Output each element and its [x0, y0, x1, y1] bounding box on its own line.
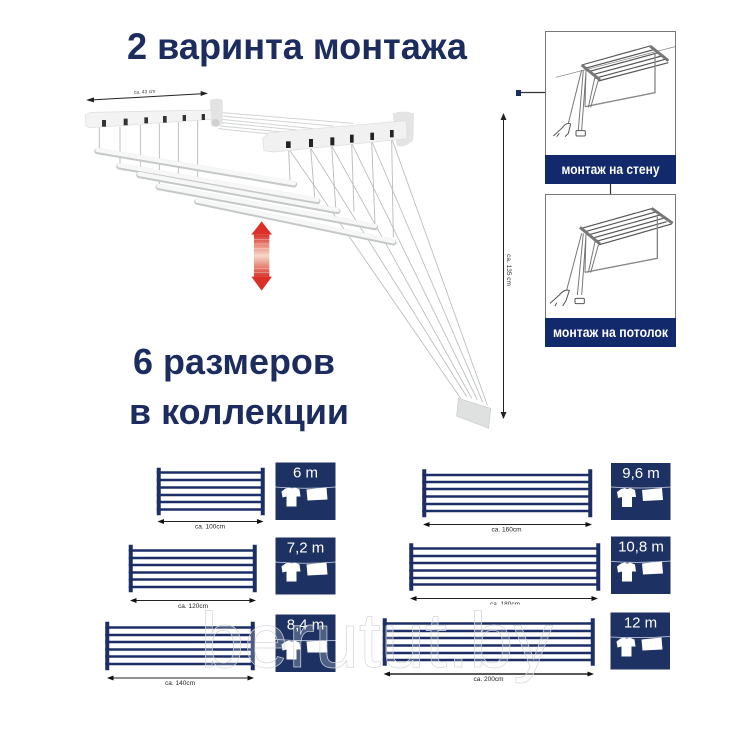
capacity box: 7,2 m: 7,2 m	[287, 540, 324, 556]
width dimension: ca. 43 cm	[86, 89, 208, 102]
capacity box: 8,4 m	[276, 614, 336, 672]
size row: 160 cm rack: ca. 160cm	[492, 526, 522, 534]
heading: in the collection: в коллекции	[129, 391, 349, 432]
size row: 180 cm rack	[410, 544, 600, 608]
wall lock	[457, 398, 491, 428]
capacity box: 9,6 m	[611, 463, 671, 520]
connector to mounting panels	[516, 90, 610, 194]
size row: 140 cm rack: ca. 140cm	[165, 680, 195, 687]
icon: red up and down arrow	[251, 221, 272, 291]
size row: 100 cm rack	[157, 468, 264, 530]
capacity box: 10,8 m: 10,8 m	[618, 538, 664, 556]
drying rods	[97, 150, 393, 242]
height dimension: ca. 135 cm	[500, 113, 512, 419]
capacity box: 9,6 m: 9,6 m	[622, 465, 660, 482]
panel: wall mounting	[545, 32, 676, 184]
label: wall mounting: монтаж на стену	[562, 162, 660, 177]
right vertical cords	[289, 138, 393, 237]
size row: 200 cm rack	[383, 618, 594, 683]
cables to the wall lock	[290, 138, 487, 405]
width dimension: ca. 43 cm: ca. 43 cm	[134, 89, 156, 96]
capacity box: 8,4 m: 8,4 m	[287, 616, 324, 634]
capacity box: 10,8 m	[611, 536, 671, 594]
size row: 140 cm rack	[106, 622, 254, 687]
sketch: ceiling mounted dryer	[550, 208, 673, 306]
watermark: berutut.by	[200, 596, 553, 684]
size row: 200 cm rack: ca. 200cm	[474, 676, 504, 683]
right mounting bar	[263, 112, 414, 152]
panel: ceiling mounting	[545, 194, 676, 347]
label: ceiling mounting: монтаж на потолок	[553, 325, 668, 340]
product photo: ceiling dryer	[85, 89, 491, 428]
left vertical cords	[99, 120, 198, 187]
size row: 120 cm rack	[129, 545, 256, 610]
size row: 100 cm rack: ca. 100cm	[195, 524, 225, 530]
sketch: wall mounted dryer	[553, 46, 675, 137]
title: 2 варинта монтажа	[127, 26, 467, 67]
left mounting bar	[85, 99, 223, 128]
capacity box: 12 m: 12 m	[624, 614, 657, 632]
size row: 120 cm rack: ca. 120cm	[178, 603, 208, 610]
capacity box: 6 m	[276, 462, 336, 520]
clipped label: ca. 180 cm: ca. 180cm	[490, 601, 520, 608]
capacity box: 12 m	[610, 612, 670, 670]
size row: 160 cm rack	[422, 470, 592, 534]
height dimension: ca. 135 cm: ca. 135 cm	[505, 254, 512, 286]
capacity box: 6 m: 6 m	[293, 464, 318, 482]
back rods between the brackets	[218, 113, 353, 134]
capacity box: 7,2 m	[276, 538, 336, 594]
heading: 6 sizes: 6 размеров	[133, 341, 335, 382]
